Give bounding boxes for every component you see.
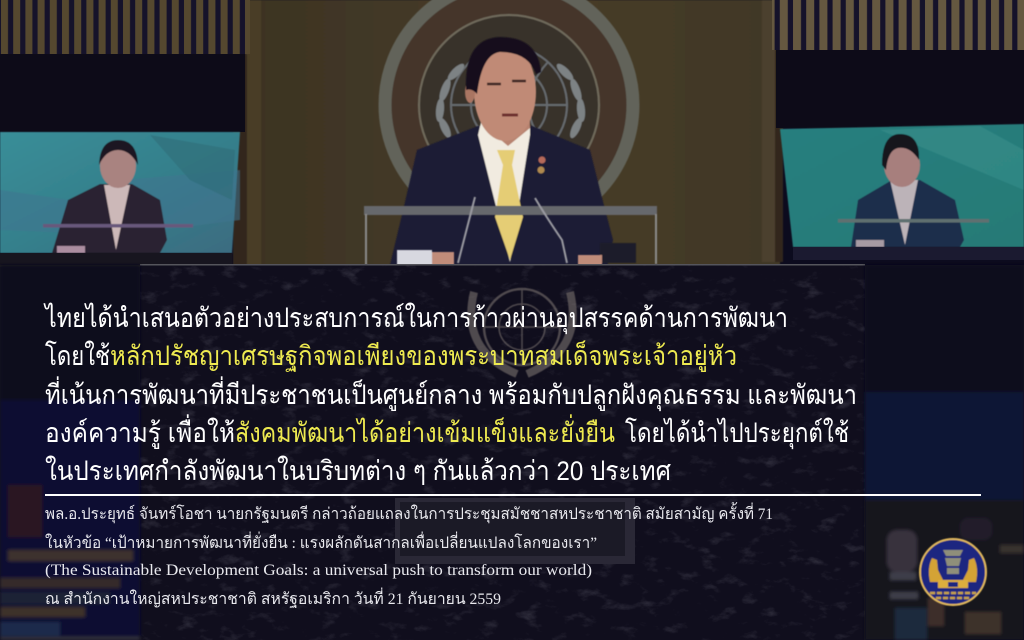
heading: main statement: องค์ความรู้ เพื่อให้ [45, 414, 235, 449]
panel: left upper ceiling slats [0, 0, 250, 54]
right screen speaker [838, 134, 989, 247]
desk top edge [140, 264, 865, 266]
text block: attribution [45, 502, 773, 608]
heading: main statement: หลักปรัชญาเศรษฐกิจพอเพียงของพระบาทสมเด็จพระเจ้าอยู่หัว [110, 338, 737, 372]
hair [466, 37, 541, 94]
panel: wall behind the speaker [233, 0, 783, 270]
panel: marble desk [140, 265, 865, 640]
marble texture [140, 265, 865, 640]
text block: attribution: ณ สำนักงานใหญ่สหประชาชาติ สหรัฐอเมริกา วันที่ 21 กันยายน 2559 [45, 587, 501, 608]
text block: attribution: พล.อ.ประยุทธ์ จันทร์โอชา นายกรัฐมนตรี กล่าวถ้อยแถลงในการประชุมสมัชชาสหประชาชาติ สมัยสามัญ ครั้งที่ 71 [45, 502, 773, 524]
panel: right side of hall [865, 265, 1024, 640]
neck and head [482, 105, 530, 146]
panel: left side of hall [0, 265, 140, 640]
panel: right video screen [780, 124, 1024, 247]
left screen speaker [43, 140, 193, 253]
heading: main statement: โดยใช้ [45, 340, 110, 371]
panel: speaker [390, 37, 613, 267]
panel: right upper ceiling slats [772, 0, 1024, 50]
heading: main statement: โดยได้นำไปประยุกต์ใช้ [625, 417, 849, 450]
seal bottom band [930, 593, 976, 598]
panel: right dark recess [776, 50, 1024, 128]
panel: lectern bar and microphones [364, 197, 657, 267]
icon: UN emblem on wall [385, 0, 633, 229]
divider rule [45, 494, 981, 496]
panel: left video screen [0, 132, 240, 253]
suit [390, 126, 613, 267]
text block: attribution: ในหัวข้อ “เป้าหมายการพัฒนาที่ยั่งยืน : แรงผลักดันสากลเพื่อเปลี่ยนแปลงโลกของเรา” [45, 531, 597, 552]
heading: main statement: ในประเทศกำลังพัฒนาในบริบทต่าง ๆ กันแล้วกว่า 20 ประเทศ [45, 455, 671, 486]
tie [495, 150, 523, 260]
gallery console on desk [395, 498, 635, 564]
left desk below screen [0, 253, 232, 267]
heading: main statement: ไทยได้นำเสนอตัวอย่างประสบการณ์ในการก้าวผ่านอุปสรรคด้านการพัฒนา [43, 302, 788, 335]
text block: attribution: (The Sustainable Development Goals: a universal push to transform our world) [45, 562, 592, 579]
seal bowl [943, 550, 963, 574]
heading: main statement: ที่เน้นการพัฒนาที่มีประชาชนเป็นศูนย์กลาง พร้อมกับปลูกฝังคุณธรรม และพัฒนา [45, 376, 857, 412]
pins [538, 156, 546, 164]
shirt [478, 122, 530, 262]
icon: UN emblem on desk [471, 289, 573, 374]
right desk below screen [793, 247, 1024, 260]
panel: left dark recess [0, 54, 245, 132]
heading: main statement: สังคมพัฒนาได้อย่างเข้มแข็งและยั่งยืน [235, 414, 615, 448]
seal pedestal [938, 580, 968, 588]
face features [487, 81, 526, 84]
icon: Thai government seal [920, 539, 986, 605]
heading: main statement [43, 302, 857, 486]
seal lions [929, 558, 977, 582]
